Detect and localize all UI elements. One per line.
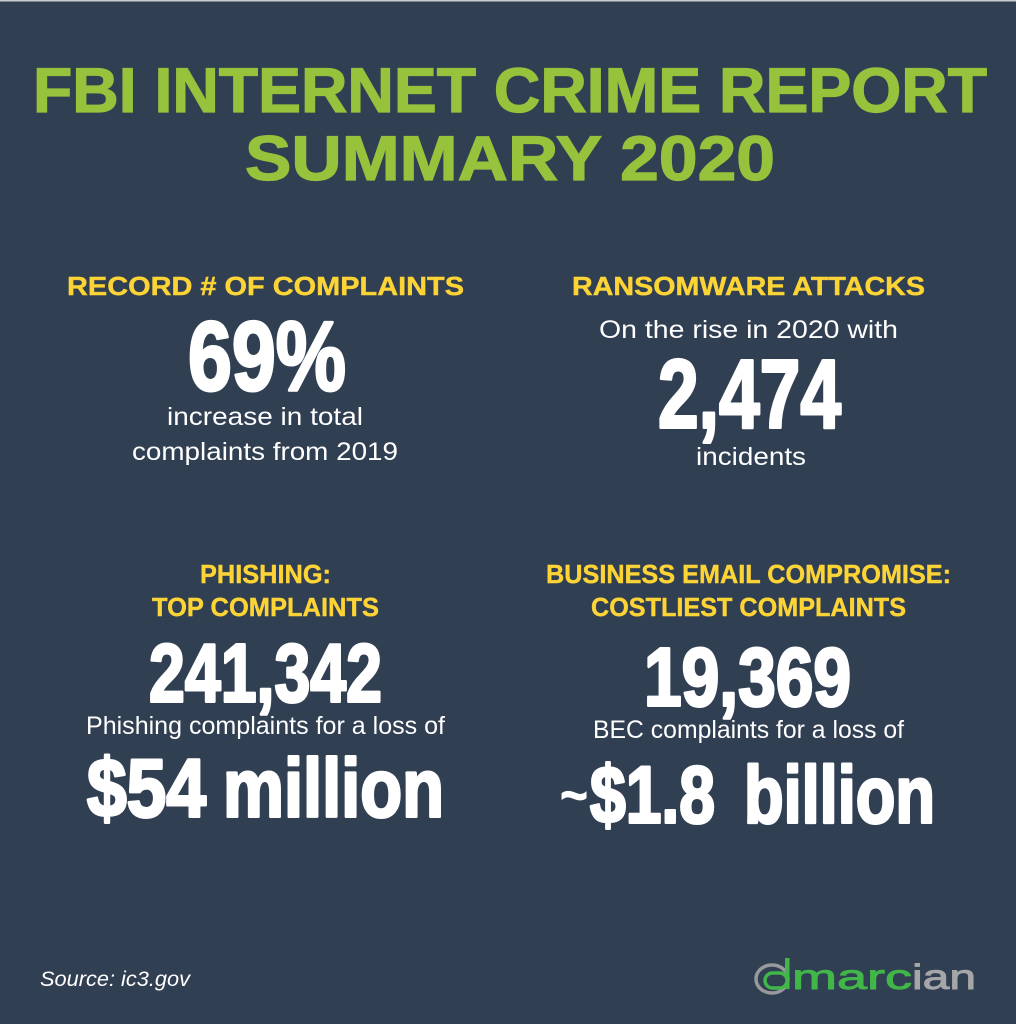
stat: $54 million: $54 <box>87 742 206 834</box>
logo: dmarcian: ian <box>912 958 976 997</box>
text: BEC complaints: BEC complaints for a loss of <box>593 716 904 744</box>
stat: ~$1.8 billion <box>560 750 935 840</box>
heading: business email compromise <box>546 559 951 622</box>
title: SUMMARY 2020 <box>245 124 775 194</box>
stat: 241,342: 241,342 <box>149 626 382 720</box>
stat: ~$1.8 billion: billion <box>744 750 935 840</box>
heading: record number of complaints: RECORD # OF COMPLAINTS <box>67 271 464 301</box>
stat: $54 million <box>87 742 444 834</box>
title: FBI INTERNET CRIME REPORT <box>33 56 987 126</box>
stat: 19,369: 19,369 <box>644 630 851 724</box>
source: Source: ic3.gov <box>40 968 192 991</box>
panel: ransomware attacks <box>572 271 925 471</box>
text: increase in complaints <box>132 403 398 466</box>
heading: ransomware attacks: RANSOMWARE ATTACKS <box>572 271 925 301</box>
panel: record complaints <box>67 271 464 466</box>
heading: phishing top complaints <box>152 559 379 622</box>
text: increase in complaints: increase in total <box>167 403 363 431</box>
stat: ~$1.8 billion: ~ <box>560 763 588 826</box>
title <box>33 56 987 194</box>
stat: 2,474: 2,474 <box>658 340 841 448</box>
heading: business email compromise: BUSINESS EMAIL COMPROMISE: <box>546 559 951 589</box>
stat: ~$1.8 billion: $1.8 <box>590 750 715 840</box>
heading: business email compromise: COSTLIEST COMPLAINTS <box>591 592 906 622</box>
text: on the rise: On the rise in 2020 with <box>599 316 898 344</box>
text: increase in complaints: complaints from 2019 <box>132 438 398 466</box>
stat: 69%: 69% <box>188 301 346 411</box>
logo: dmarcian: marc <box>792 958 912 997</box>
panel: phishing <box>86 559 445 834</box>
stat: $54 million: million <box>223 742 444 834</box>
text: incidents: incidents <box>696 443 806 471</box>
logo: dmarcian <box>756 958 976 997</box>
panel: business email compromise <box>546 559 951 840</box>
heading: phishing top complaints: TOP COMPLAINTS <box>152 592 379 622</box>
text: phishing complaints: Phishing complaints for a loss of <box>86 712 445 740</box>
heading: phishing top complaints: PHISHING: <box>200 559 331 589</box>
